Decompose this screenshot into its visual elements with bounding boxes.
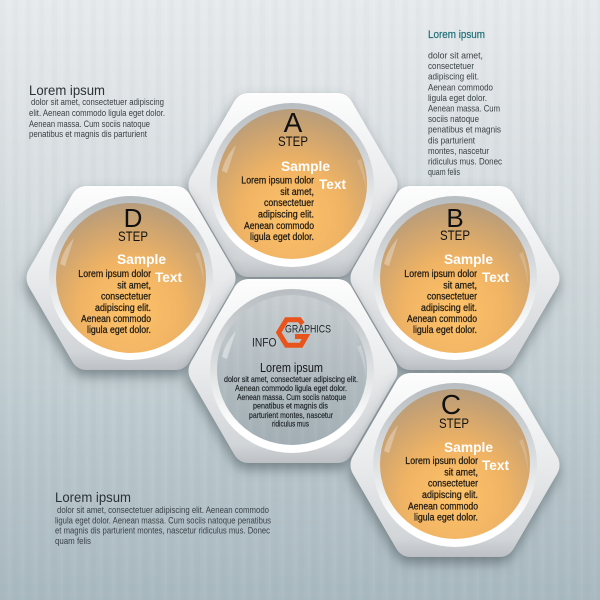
text block: top right: Aenean massa. Cum <box>428 104 500 114</box>
panel: step B: sit amet, <box>443 280 477 292</box>
panel: step B <box>350 186 560 370</box>
text block: bottom left: Lorem ipsum <box>55 489 131 505</box>
panel: step A: adipiscing elit. <box>258 210 314 220</box>
panel: step B: Sample <box>444 251 493 267</box>
text block: top right <box>428 29 502 178</box>
panel: step D: ligula eget dolor. <box>87 325 151 336</box>
panel: centre infographics: Lorem ipsum <box>260 361 323 375</box>
text block: top right: montes, nascetur <box>428 146 489 157</box>
panel: step B: B <box>446 203 464 233</box>
text block: top right: penatibus et magnis <box>428 125 501 136</box>
panel: step C: STEP <box>439 415 469 431</box>
text block: top right: ligula eget dolor. <box>428 93 487 104</box>
panel: step A: Text <box>319 176 346 192</box>
panel: step A: STEP <box>278 133 308 149</box>
panel: step D: adipiscing elit. <box>95 303 151 314</box>
panel: step C: Aenean commodo <box>408 502 478 512</box>
panel: step B: ligula eget dolor. <box>413 325 477 336</box>
text block: top right: adipiscing elit. <box>428 72 479 83</box>
panel: step A <box>188 93 398 277</box>
text block: top right: ridiculus mus. Donec <box>428 156 502 168</box>
panel: step C: Sample <box>444 439 493 455</box>
panel: step D: Sample <box>117 251 166 267</box>
text block: top left: dolor sit amet, consectetuer adipiscing <box>31 97 164 107</box>
text block: top left: Aenean massa. Cum sociis natoque <box>29 119 150 129</box>
text block: top right: Aenean commodo <box>428 82 493 93</box>
panel: step D: D <box>124 203 142 233</box>
panel: step A: Lorem ipsum dolor <box>241 176 315 186</box>
logo: orange hexagon G <box>279 320 306 345</box>
text block: top left: Lorem ipsum <box>29 82 105 98</box>
panel: step D: Text <box>155 269 182 285</box>
text block: top right: Lorem ipsum <box>428 29 485 41</box>
panel: step C: adipiscing elit. <box>422 490 478 501</box>
panel: step C: consectetuer <box>428 478 479 490</box>
panel: step B: adipiscing elit. <box>421 303 477 314</box>
panel: step C: Lorem ipsum dolor <box>405 456 479 467</box>
panel: centre infographics: Aenean commodo ligula eget dolor. <box>235 383 347 393</box>
panel: step C: C <box>441 389 461 420</box>
text block: top right: sociis natoque <box>428 114 479 125</box>
panel: step D: Aenean commodo <box>81 314 151 325</box>
panel: step B: consectetuer <box>427 292 478 302</box>
panel: step B: Lorem ipsum dolor <box>404 269 478 280</box>
text block: top right: dis parturient <box>428 135 475 146</box>
text block: bottom left: et magnis dis parturient montes, nascetur ridiculus mus. Donec <box>55 526 270 536</box>
panel: step D: sit amet, <box>117 280 151 292</box>
panel: centre infographics: ridiculus mus <box>272 418 309 428</box>
text block: bottom left: dolor sit amet, consectetuer adipiscing elit. Aenean commodo <box>57 505 269 515</box>
panel: centre infographics: dolor sit amet, consectetuer adipiscing elit. <box>224 374 358 384</box>
text block: bottom left <box>55 489 271 546</box>
text block: top left: penatibus et magnis dis parturient <box>29 129 147 139</box>
panel: step A: Sample <box>281 158 330 174</box>
panel: step C <box>350 373 560 557</box>
text block: bottom left: quam felis <box>55 536 91 546</box>
text block: top right: consectetuer <box>428 61 474 72</box>
text block: bottom left: ligula eget dolor. Aenean massa. Cum sociis natoque penatibus <box>55 516 271 526</box>
text block: top left <box>29 82 165 139</box>
panel: step D: STEP <box>118 228 148 244</box>
panel: centre infographics: Aenean massa. Cum sociis natoque <box>237 392 346 402</box>
panel: step B: Aenean commodo <box>407 314 477 325</box>
panel: step A: consectetuer <box>264 198 315 209</box>
text block: top right: quam felis <box>428 167 460 178</box>
text block: top left: elit. Aenean commodo ligula eget dolor. <box>29 108 165 118</box>
panel: centre infographics: parturient montes, nascetur <box>249 410 333 420</box>
panel: step C: ligula eget dolor. <box>414 512 478 524</box>
panel: step A: Aenean commodo <box>244 221 314 232</box>
panel: step D: Lorem ipsum dolor <box>78 269 152 280</box>
panel: step A: sit amet, <box>280 187 314 198</box>
panel: step D <box>26 186 236 370</box>
panel: step A: A <box>284 107 303 138</box>
panel: step B: Text <box>482 269 509 285</box>
panel: step C: sit amet, <box>444 468 478 478</box>
text block: top right: dolor sit amet, <box>428 50 483 62</box>
panel: step B: STEP <box>440 227 470 243</box>
panel: step C: Text <box>482 457 509 473</box>
panel: step A: ligula eget dolor. <box>250 232 314 243</box>
panel: centre infographics <box>188 279 398 463</box>
panel: centre infographics: penatibus et magnis dis <box>253 400 328 410</box>
panel: centre infographics: GRAPHICS <box>285 323 331 335</box>
panel: centre infographics: INFO <box>252 336 276 350</box>
panel: step D: consectetuer <box>101 292 152 302</box>
